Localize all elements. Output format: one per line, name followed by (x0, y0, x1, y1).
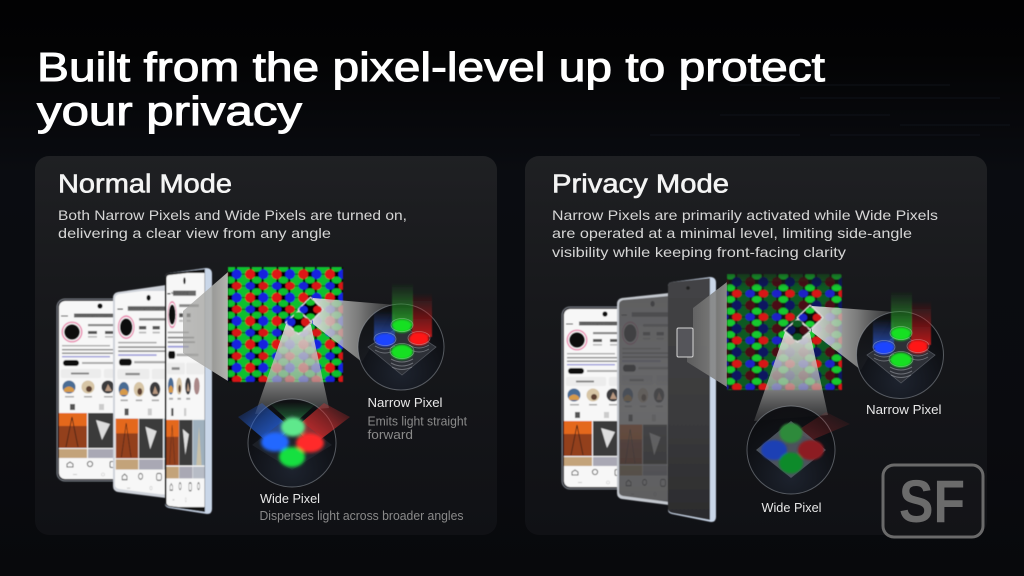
label: narrow pixel, privacy: Narrow Pixel (866, 402, 942, 417)
phone: back left, clear: samsungverifiyphone (581, 320, 623, 325)
panel: privacy mode (525, 156, 987, 535)
background streaks (650, 85, 1010, 135)
beam: narrow pixel (313, 298, 396, 362)
viewing window on phone (677, 328, 693, 357)
magnified pixel diamonds, privacy (784, 305, 823, 342)
phone: front, privacy on (668, 277, 716, 522)
phone: back left (56, 298, 114, 482)
description: privacy mode: are operated at a minimal level, limiting side-angle (552, 225, 912, 241)
phone: back left, clear (560, 306, 618, 490)
description: privacy mode: Narrow Pixels are primarily activated while Wide Pixels (552, 207, 938, 223)
beam: phone to pixel grid (183, 272, 228, 381)
label: narrow pixel: Emits light straight (368, 414, 468, 428)
title: your privacy (37, 88, 303, 134)
pixel grid: normal mode (228, 267, 343, 382)
phone: middle: samsungverifiyphone (128, 305, 170, 310)
beam: phone to pixel grid, privacy (687, 282, 727, 387)
icon: wide pixel lens (238, 399, 350, 487)
icon: narrow pixel lens, privacy (856, 291, 944, 398)
label: narrow pixel: Narrow Pixel (368, 395, 443, 410)
pixel grid: privacy mode (727, 274, 842, 390)
phone: middle, dimming (616, 292, 669, 506)
label: narrow pixel (368, 395, 468, 442)
beam: wide pixel, privacy (754, 332, 828, 421)
phone: back left: samsungverifiyphone (76, 312, 118, 317)
icon: wide pixel lens, privacy (747, 406, 850, 494)
label: narrow pixel: forward (368, 428, 413, 442)
beam: wide pixel (255, 324, 329, 414)
panel: normal mode (35, 156, 497, 535)
heading: normal mode: Normal Mode (58, 170, 232, 198)
description: privacy mode (552, 207, 938, 260)
label: wide pixel: Wide Pixel (260, 491, 320, 506)
infographic canvas (35, 51, 987, 538)
icon: narrow pixel lens (358, 283, 444, 390)
description: normal mode: Both Narrow Pixels and Wide Pixels are turned on, (58, 207, 407, 223)
description: normal mode (58, 207, 407, 241)
title: Built from the pixel-level up to protect (37, 44, 826, 90)
phone: front (165, 268, 212, 514)
description: normal mode: delivering a clear view from any angle (58, 225, 331, 241)
heading: privacy mode: Privacy Mode (552, 170, 729, 198)
beam: narrow pixel, privacy (812, 306, 895, 370)
phone: middle (112, 284, 166, 498)
label: wide pixel (260, 491, 464, 523)
watermark: SF logo: SF (899, 468, 965, 535)
description: privacy mode: visibility while keeping front-facing clarity (552, 244, 846, 260)
label: wide pixel, privacy: Wide Pixel (762, 500, 822, 515)
label: wide pixel: Disperses light across broader angles (260, 509, 464, 523)
magnified pixel diamonds (286, 297, 323, 334)
phone: front: samsung (171, 290, 189, 295)
title (37, 44, 826, 134)
